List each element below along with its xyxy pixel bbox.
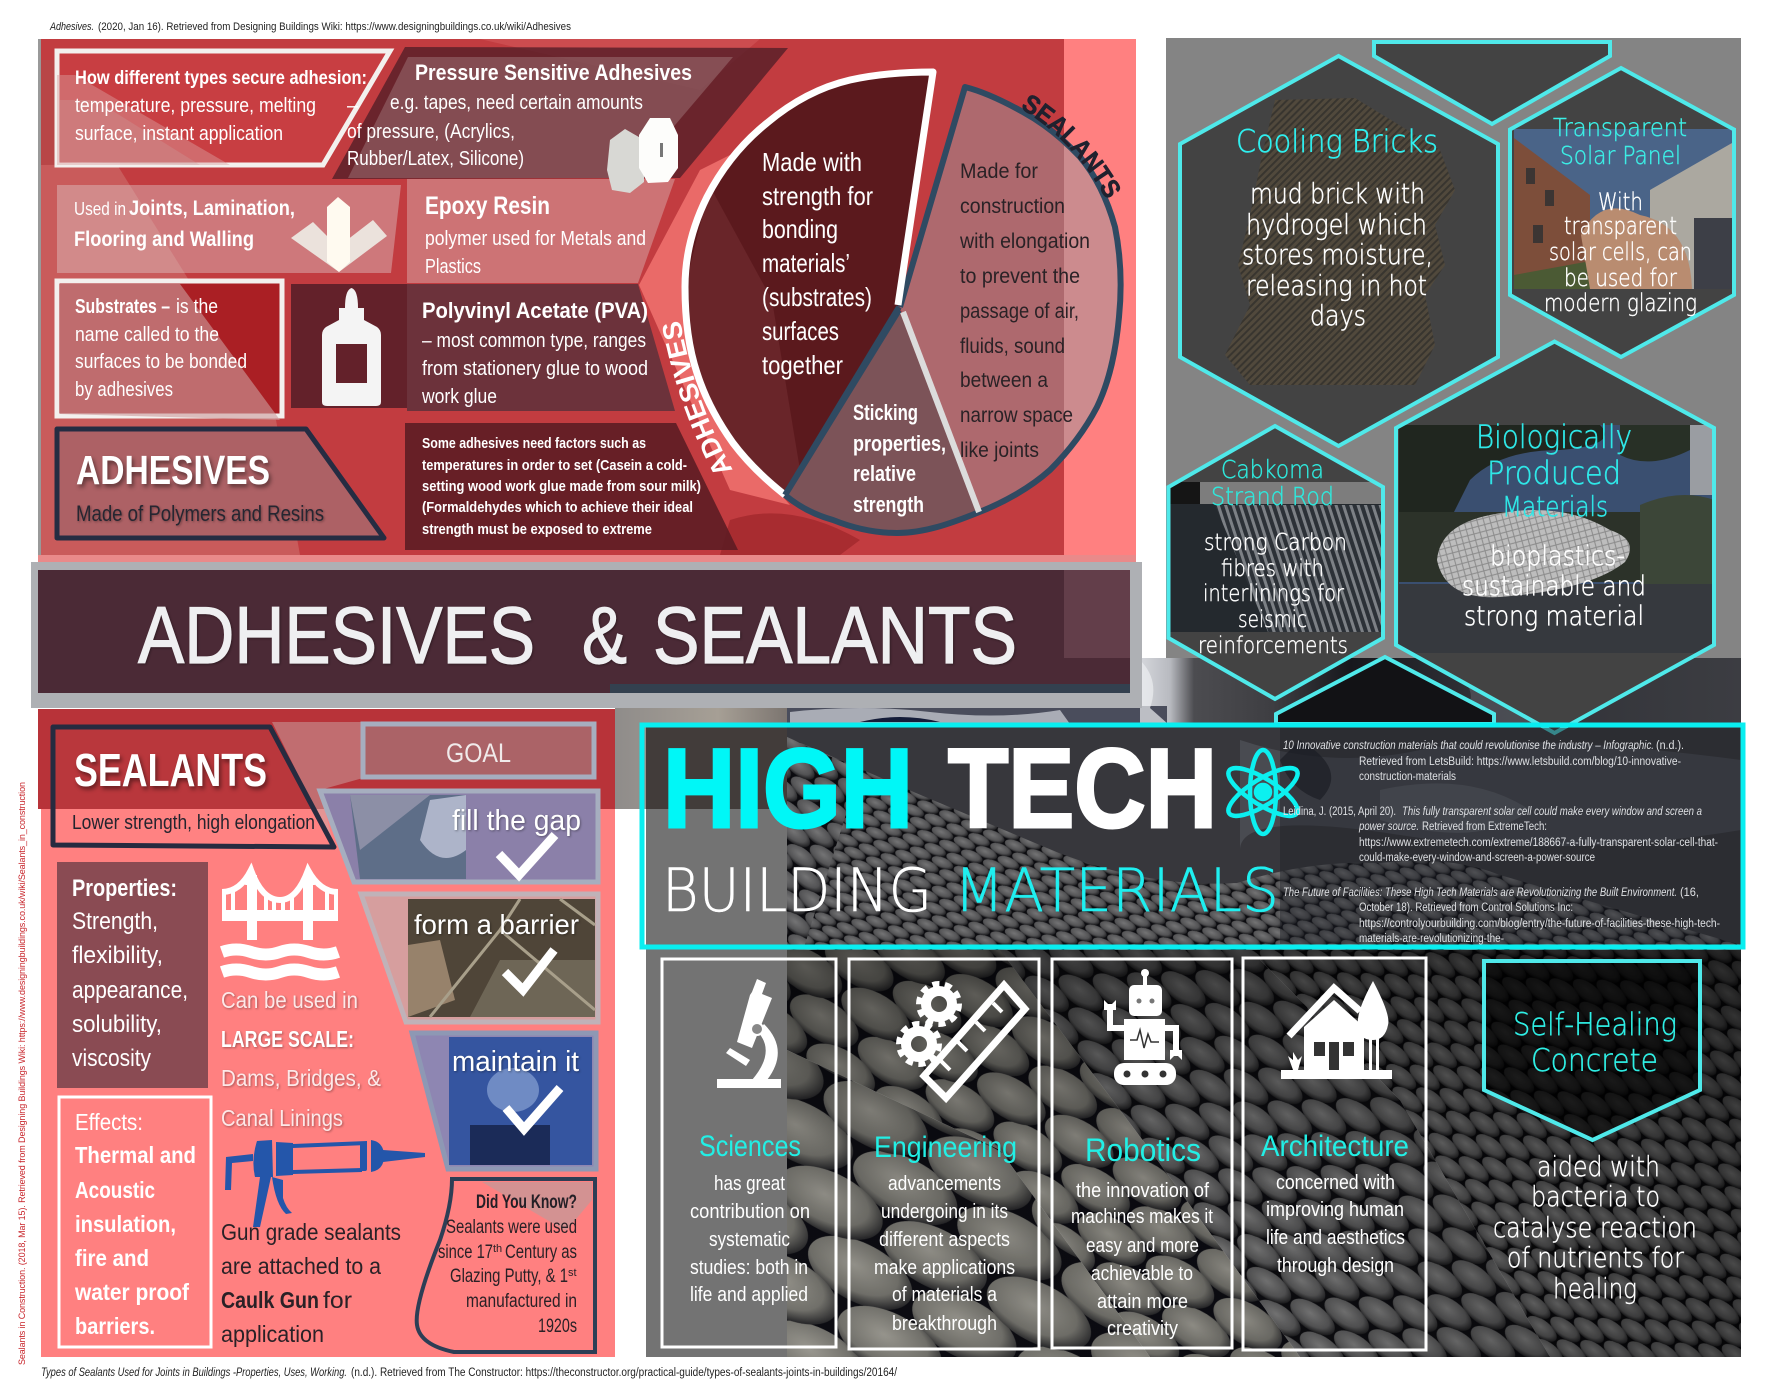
panel: polyvinyl acetate: work glue <box>421 386 497 408</box>
panel: how different types secure adhesion: – <box>347 95 359 117</box>
references list: October 18). Retrieved from Control Solutions Inc: <box>1359 902 1573 914</box>
photo: dome scales and cloudy sky <box>787 725 1741 1357</box>
icon: microscope <box>717 979 781 1088</box>
references list: Retrieved from ExtremeTech: <box>1422 821 1547 833</box>
panel: factors note <box>405 423 738 550</box>
citation: constructor source <box>41 1367 898 1379</box>
panel: effects: Acoustic <box>75 1177 155 1203</box>
column: robotics: creativity <box>1107 1318 1178 1340</box>
callout: did you know: Century as <box>505 1242 577 1263</box>
panel: polyvinyl acetate: Polyvinyl Acetate (PVA) <box>422 298 648 323</box>
panel: pressure sensitive adhesives: e.g. tapes, need certain amounts <box>390 92 643 114</box>
panel: sealants background <box>38 709 615 1357</box>
shape: lower cut hexagon <box>1276 657 1494 724</box>
icon: check mark <box>505 950 554 990</box>
heading: sealants: Lower strength, high elongation <box>72 812 315 834</box>
panel: properties: appearance, <box>72 977 188 1004</box>
chart: adhesives versus sealants pie <box>662 68 1124 536</box>
title box: high tech building materials: TECH <box>948 726 1217 851</box>
title banner: adhesives and sealants: SEALANTS <box>653 591 1017 681</box>
column: engineering: advancements <box>888 1173 1001 1195</box>
panel: factors note: temperatures in order to set (Casein a cold- <box>422 457 687 474</box>
panel: how different types secure adhesion <box>57 51 390 165</box>
hexagon: cabkoma strand rod: reinforcements <box>1198 633 1348 659</box>
column: sciences: studies: both in <box>690 1257 808 1279</box>
panel: polyvinyl acetate: – most common type, ranges <box>422 330 646 352</box>
column: architecture <box>1243 958 1426 1350</box>
panel: self-healing concrete: aided with <box>1537 1150 1660 1183</box>
panel: factors note: Some adhesives need factors such as <box>422 435 646 452</box>
text: large scale use: Canal Linings <box>221 1105 343 1131</box>
badge: self-healing heading <box>1484 961 1700 1140</box>
hexagon: cooling bricks: days <box>1310 299 1366 332</box>
icon: corner joint arrow <box>291 197 387 272</box>
column: robotics: attain more <box>1097 1291 1188 1313</box>
text: caulk gun application: are attached to a <box>221 1253 381 1279</box>
callout: did you know: Did You Know? <box>476 1192 577 1213</box>
title box: high tech building materials: MATERIALS <box>954 856 1279 926</box>
text: caulk gun application: Caulk Gun <box>221 1287 319 1313</box>
text: caulk gun application: application <box>221 1321 324 1347</box>
references list: Retrieved from LetsBuild: https://www.letsbuild.com/blog/10-innovative- <box>1359 756 1681 768</box>
hexagon: cooling bricks: stores moisture, <box>1242 238 1433 271</box>
panel: self-healing concrete: healing <box>1553 1272 1637 1305</box>
column: architecture: concerned with <box>1276 1172 1395 1194</box>
citation: constructor source: Types of Sealants Used for Joints in Buildings -Properties, Uses, Working. <box>41 1367 347 1379</box>
pie slice: sticking properties: strength <box>853 492 924 517</box>
panel: used in joints: Flooring and Walling <box>74 228 254 251</box>
hexagon: biologically produced materials: sustainable and <box>1462 571 1646 602</box>
label: goal: GOAL <box>446 738 511 768</box>
hexagon: transparent solar panel: solar cells, can <box>1549 238 1692 266</box>
panel: polyvinyl acetate: from stationery glue to wood <box>422 358 648 380</box>
goal step: maintain it <box>412 1033 596 1169</box>
pie slice: sticking properties: Sticking <box>853 400 918 425</box>
title banner: adhesives and sealants <box>31 562 1142 708</box>
badge: self-healing heading: Self-Healing <box>1513 1007 1677 1043</box>
icon: house and tree <box>1281 981 1392 1079</box>
goal step: form a barrier: form a barrier <box>414 909 579 940</box>
pie slice: adhesives: (substrates) <box>762 282 872 312</box>
hexagon: biologically produced materials: strong material <box>1464 601 1644 632</box>
references list: Leidina, J. (2015, April 20). <box>1283 806 1396 818</box>
column: architecture: Architecture <box>1261 1130 1409 1163</box>
column: engineering: different aspects <box>879 1229 1010 1251</box>
pie slice: adhesives: together <box>762 350 843 380</box>
icon: robot <box>1104 969 1182 1085</box>
references list: (n.d.). <box>1656 740 1684 752</box>
pie slice: sealants: Made for <box>960 160 1038 183</box>
hexagon: cabkoma strand rod: Strand Rod <box>1211 482 1334 511</box>
panel: properties: Properties: <box>72 875 177 902</box>
panel: properties: viscosity <box>72 1045 151 1072</box>
callout: did you know: Glazing Putty, & 1 <box>450 1266 568 1287</box>
column: engineering: breakthrough <box>892 1313 997 1335</box>
title banner: adhesives and sealants: & <box>582 591 627 681</box>
callout: did you know <box>417 1179 595 1352</box>
title banner: adhesives and sealants: ADHESIVES <box>138 591 535 681</box>
heading: adhesives: Made of Polymers and Resins <box>76 501 324 526</box>
pie slice: sealants <box>898 84 1124 516</box>
hexagon: cooling bricks: Cooling Bricks <box>1236 124 1438 160</box>
heading: sealants: SEALANTS <box>74 744 267 796</box>
pie slice: adhesives: bonding <box>762 214 838 244</box>
text: large scale use: LARGE SCALE: <box>221 1026 354 1052</box>
column: architecture: improving human <box>1266 1199 1404 1221</box>
panel: pressure sensitive adhesives: Rubber/Latex, Silicone) <box>347 148 524 170</box>
icon: glue bottle <box>322 288 381 406</box>
column: robotics: the innovation of <box>1076 1180 1209 1202</box>
icon: atom <box>1222 750 1304 834</box>
panel: substrates definition: surfaces to be bonded <box>75 351 247 373</box>
column: architecture: life and aesthetics <box>1266 1227 1405 1249</box>
hexagon: biologically produced materials: Biologically <box>1476 418 1632 456</box>
callout: did you know: manufactured in <box>466 1291 577 1312</box>
panel: high tech hexagon background <box>1166 38 1741 658</box>
pie slice: sealants: like joints <box>960 439 1039 462</box>
text: large scale use: Can be used in <box>221 987 358 1013</box>
hexagon: cabkoma strand rod: fibres with <box>1221 556 1324 582</box>
hexagon: cabkoma strand rod: strong Carbon <box>1204 530 1347 556</box>
panel: gray strip left of dome photo <box>615 708 787 1357</box>
callout: did you know: since 17 <box>438 1242 493 1263</box>
panel: effects: insulation, <box>75 1211 176 1237</box>
icon: check mark <box>499 835 555 875</box>
text: large scale use: Dams, Bridges, & <box>221 1065 381 1091</box>
panel: used in joints <box>57 185 401 273</box>
column: engineering: of materials a <box>892 1284 998 1306</box>
column: sciences: has great <box>714 1173 785 1195</box>
references list: power source. <box>1358 821 1419 833</box>
references list <box>1283 740 1720 945</box>
panel: sky photo band <box>787 658 1741 728</box>
pie slice: sealants: passage of air, <box>960 300 1079 323</box>
citation: sealants vertical source: Sealants in Construction. (2018, Mar 15). Retrieved from Designing Buildings Wiki: https://www.designingbuildings.co.uk/wiki/Sealants_in_construction <box>17 782 27 1365</box>
texture: far dome surface <box>787 737 1741 960</box>
label: goal <box>363 724 594 777</box>
heading: adhesives: ADHESIVES <box>76 447 270 493</box>
panel: pressure sensitive adhesives <box>332 47 788 179</box>
panel: self-healing concrete: bacteria to <box>1531 1180 1660 1213</box>
icon: tape rolls <box>607 118 678 193</box>
citation: constructor source: (n.d.). Retrieved from The Constructor: https://theconstructor.org/practical-guide/types-of-sealants-joints-in-buildings/20164/ <box>351 1367 898 1379</box>
panel: adhesives background <box>38 39 1136 562</box>
panel: effects: Effects: <box>75 1109 143 1135</box>
panel: how different types secure adhesion: surface, instant application <box>75 123 283 145</box>
column: robotics <box>1052 959 1232 1348</box>
pie slice: sealants: to prevent the <box>960 265 1080 288</box>
pie slice: adhesives <box>662 68 936 498</box>
pie slice: sealants: fluids, sound <box>960 335 1065 358</box>
references list: This fully transparent solar cell could make every window and screen a <box>1402 806 1702 818</box>
column: robotics: Robotics <box>1085 1132 1201 1168</box>
pie slice: adhesives: Made with <box>762 147 862 177</box>
hexagon: transparent solar panel: modern glazing <box>1544 289 1697 317</box>
title box: high tech building materials: HIGH <box>663 726 913 851</box>
column: sciences <box>662 959 836 1347</box>
callout: did you know: th <box>493 1243 502 1255</box>
goal step: maintain it: maintain it <box>452 1046 579 1078</box>
panel: used in joints: Joints, Lamination, <box>129 197 295 220</box>
column: robotics: machines makes it <box>1071 1206 1213 1228</box>
panel: used in joints: Used in <box>74 199 126 219</box>
heading: sealants <box>53 727 334 847</box>
panel: self-healing concrete <box>1484 961 1700 1305</box>
shape: top cut hexagon <box>1374 42 1610 124</box>
photo: mud bricks <box>1225 98 1455 385</box>
references list: 10 Innovative construction materials that could revolutionise the industry – Infographic. <box>1283 740 1654 752</box>
panel: polyvinyl acetate <box>291 284 675 411</box>
column: robotics: easy and more <box>1086 1235 1199 1257</box>
panel: properties: solubility, <box>72 1011 162 1038</box>
hexagon: cooling bricks <box>1180 56 1498 446</box>
panel: how different types secure adhesion: temperature, pressure, melting <box>75 95 316 117</box>
heading: adhesives <box>57 429 384 538</box>
pie slice: sealants: with elongation <box>959 230 1090 253</box>
column: engineering <box>849 959 1039 1349</box>
hexagon: transparent solar panel: be used for <box>1564 264 1677 292</box>
photo: carbon rods <box>1170 482 1381 632</box>
hexagon: transparent solar panel: Solar Panel <box>1560 141 1681 170</box>
hexagon: cabkoma strand rod: interlinings for <box>1203 581 1344 607</box>
hexagon: biologically produced materials: Produced <box>1487 454 1621 492</box>
panel: substrates definition <box>57 281 282 420</box>
pie slice: sticking properties <box>785 310 979 533</box>
panel: substrates definition: Substrates – <box>75 296 170 318</box>
text: caulk gun application: for <box>323 1287 352 1313</box>
pie slice: adhesives: strength for <box>762 181 873 211</box>
pie slice: sealants: SEALANTS <box>1022 95 1120 198</box>
hexagon: cabkoma strand rod: seismic <box>1238 607 1307 633</box>
panel: substrates definition: is the <box>176 296 218 318</box>
references list: https://www.extremetech.com/extreme/188667-a-fully-transparent-solar-cell-that- <box>1359 837 1718 849</box>
column: engineering: Engineering <box>874 1131 1017 1164</box>
panel: substrates definition: name called to the <box>75 324 219 346</box>
hexagon: cooling bricks: hydrogel which <box>1246 208 1427 241</box>
panel: properties <box>57 862 208 1088</box>
pie slice: sealants: narrow space <box>960 404 1073 427</box>
icon: gears and ruler <box>899 984 1025 1098</box>
references list: materials-are-revolutionizing-the- <box>1359 933 1504 945</box>
references list: construction-materials <box>1359 771 1456 783</box>
icon: bridge over water <box>222 864 338 974</box>
pie slice: adhesives: surfaces <box>762 316 839 346</box>
hexagon: transparent solar panel: Transparent <box>1553 113 1687 142</box>
column: robotics: achievable to <box>1091 1263 1193 1285</box>
panel: factors note: strength must be exposed to extreme <box>422 521 652 538</box>
text: caulk gun application: Gun grade sealants <box>221 1219 401 1245</box>
pie slice: adhesives: materials’ <box>762 248 850 278</box>
callout: did you know: 1920s <box>538 1316 577 1337</box>
pie slice: adhesives: ADHESIVES <box>662 322 732 472</box>
goal step: fill the gap <box>320 791 598 882</box>
hexagon: transparent solar panel: transparent <box>1564 212 1677 240</box>
panel: effects <box>59 1097 211 1347</box>
icon: caulk gun <box>225 1140 425 1227</box>
panel: self-healing concrete: of nutrients for <box>1507 1241 1684 1274</box>
hexagon: cooling bricks: mud brick with <box>1250 177 1425 210</box>
panel: epoxy resin: Plastics <box>425 256 481 278</box>
references list: (16, <box>1680 887 1699 899</box>
callout: did you know: Sealants were used <box>446 1217 577 1238</box>
hexagon: cooling bricks: releasing in hot <box>1246 269 1427 302</box>
references list: could-make-every-window-and-screen-a-power-source <box>1359 852 1595 864</box>
hexagon: cabkoma strand rod: Cabkoma <box>1221 455 1324 484</box>
goal step: form a barrier <box>361 894 598 1022</box>
references list: The Future of Facilities: These High Tech Materials are Revolutionizing the Built Environment. <box>1283 887 1677 899</box>
panel: self-healing concrete: catalyse reaction <box>1493 1211 1697 1244</box>
photo: bioplastic pavilion <box>1399 425 1714 653</box>
texture: near dome scales <box>1250 950 1741 1357</box>
text: caulk gun application <box>221 1219 401 1347</box>
callout: did you know: st <box>568 1267 577 1279</box>
column: engineering: make applications <box>874 1257 1015 1279</box>
panel: epoxy resin: polymer used for Metals and <box>425 228 646 250</box>
hexagon: transparent solar panel <box>1510 68 1734 357</box>
references list: https://controlyourbuilding.com/blog/entry/the-future-of-facilities-these-high-tech- <box>1359 918 1720 930</box>
panel: pressure sensitive adhesives: Pressure Sensitive Adhesives <box>415 60 692 85</box>
hexagon: transparent solar panel: With <box>1598 188 1643 216</box>
title box: high tech building materials: BUILDING <box>662 856 932 926</box>
panel: factors note: (Formaldehydes which to achieve their ideal <box>422 499 693 516</box>
panel: factors note: setting wood work glue made from sour milk) <box>422 478 701 495</box>
hexagon: biologically produced materials: Materials <box>1502 490 1608 523</box>
pie slice: sticking properties: properties, <box>853 431 946 456</box>
goal step: fill the gap: fill the gap <box>452 805 581 837</box>
title box: high tech building materials <box>642 725 1743 947</box>
column: engineering: undergoing in its <box>881 1201 1008 1223</box>
pie slice: sticking properties: relative <box>853 461 916 486</box>
hexagon: biologically produced materials <box>1396 342 1714 733</box>
panel: pressure sensitive adhesives: of pressure, (Acrylics, <box>347 121 515 143</box>
citation: adhesives source: Adhesives. <box>49 21 94 33</box>
pie slice: sealants: between a <box>960 369 1048 392</box>
column: architecture: through design <box>1277 1255 1394 1277</box>
panel: effects: water proof <box>74 1279 189 1305</box>
panel: effects: fire and <box>75 1245 149 1271</box>
column: sciences: systematic <box>709 1229 790 1251</box>
column: sciences: life and applied <box>690 1284 808 1306</box>
panel: epoxy resin <box>407 179 675 283</box>
pie slice: sealants: construction <box>960 195 1065 218</box>
panel: properties: Strength, <box>72 908 158 935</box>
panel: substrates definition: by adhesives <box>75 379 173 401</box>
photo: solar panel building <box>1514 129 1732 289</box>
citation: adhesives source: (2020, Jan 16). Retrieved from Designing Buildings Wiki: https://www.designingbuildings.co.uk/wiki/Adhesives <box>98 21 571 33</box>
panel: how different types secure adhesion: How different types secure adhesion: <box>75 68 367 89</box>
hexagon: biologically produced materials: bioplastics- <box>1490 541 1625 572</box>
panel: properties: flexibility, <box>72 942 163 969</box>
column: sciences: contribution on <box>690 1201 810 1223</box>
badge: self-healing heading: Concrete <box>1531 1043 1658 1079</box>
icon: check mark <box>506 1088 560 1129</box>
column: sciences: Sciences <box>699 1130 801 1163</box>
panel: epoxy resin: Epoxy Resin <box>425 192 550 220</box>
text: large scale use <box>221 987 381 1131</box>
panel: effects: barriers. <box>75 1313 155 1339</box>
panel: effects: Thermal and <box>75 1142 196 1168</box>
hexagon: cabkoma strand rod <box>1168 426 1383 699</box>
